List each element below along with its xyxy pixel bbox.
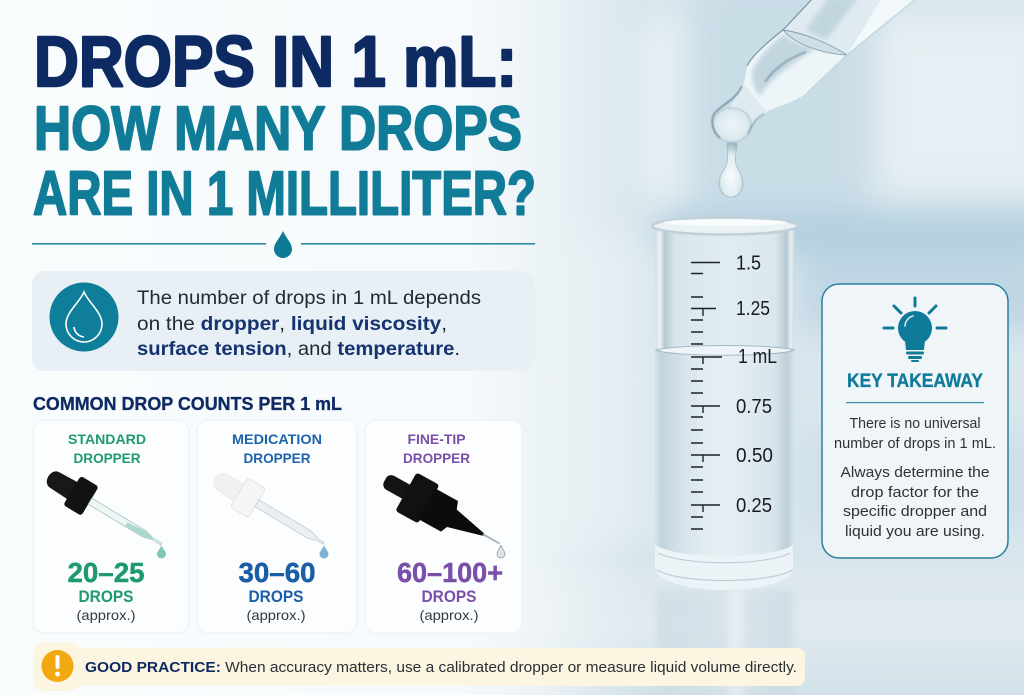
title: DROPS IN 1 mL: [34,23,517,102]
icon: water drop in circle [50,282,118,352]
card: standard dropper [33,420,189,633]
count: 60-100+ drops: DROPS [422,587,476,606]
count: 30-60 drops [238,557,316,606]
graduation labels [736,252,777,517]
standard dropper label: STANDARD [68,431,146,447]
glass pipette with hanging drop [712,0,917,197]
intro text [137,287,481,360]
count: 60-100+ drops: 60–100+ [397,557,503,588]
count: 20-25 drops: 20–25 [68,557,144,588]
intro text: The number of drops in 1 mL depends [137,287,481,309]
title divider with drop [32,231,535,258]
fine-tip dropper label [403,431,470,466]
icon: white dropper [207,464,333,558]
graduation labels: 0.25 [736,494,772,517]
icon: warning circle [42,650,74,682]
title: HOW MANY DROPS [34,94,522,164]
graduation labels: 1.5 [736,252,761,274]
key takeaway text: drop factor for the [851,485,979,501]
intro panel [32,271,535,371]
medication dropper label [232,431,322,466]
key takeaway text [834,416,996,540]
standard dropper label [68,431,146,466]
beaker glass body [652,218,798,590]
beaker reflection on table [657,590,793,695]
graduation labels: 0.50 [736,444,773,467]
key takeaway panel [822,284,1008,558]
count: 60-100+ drops [397,557,503,606]
falling drop [719,143,743,197]
graduation labels: 1.25 [736,297,770,320]
title [33,23,536,228]
graduation labels: 0.75 [736,395,772,418]
count: 20-25 drops [68,557,144,606]
fine-tip dropper label: DROPPER [403,450,470,466]
section heading: COMMON DROP COUNTS PER 1 mL [33,393,342,414]
graduation labels: 1 mL [738,345,777,368]
intro text: on the dropper , liquid viscosity , [137,313,447,335]
approx note: (approx.) [76,607,136,623]
neck and bulb at pipette tip [712,84,767,143]
icon: light bulb [884,298,946,362]
pipette tube [742,0,917,112]
card: medication dropper [197,420,357,633]
key takeaway text: There is no universal [850,416,980,432]
approx note: (approx.) [246,607,306,623]
key takeaway text: Always determine the [840,465,990,481]
medication dropper label: MEDICATION [232,431,322,447]
key takeaway text: liquid you are using. [845,524,985,540]
icon: black dropper [40,462,170,559]
graduation ticks [691,262,722,529]
banner text: GOOD PRACTICE: When accuracy matters, use a calibrated dropper or measure liquid volume directly. [85,660,797,676]
card: fine-tip dropper [365,420,522,633]
icon: fine-tip black dropper [374,461,510,563]
fine-tip dropper label: FINE-TIP [408,431,466,447]
measuring beaker [652,218,798,695]
count: 30-60 drops: 30–60 [238,557,316,588]
approx note: (approx.) [420,607,478,623]
standard dropper label: DROPPER [74,450,140,466]
count: 20-25 drops: DROPS [78,587,134,606]
medication dropper label: DROPPER [244,450,310,466]
good practice banner [33,642,805,691]
key takeaway text: number of drops in 1 mL. [834,436,996,452]
title: ARE IN 1 MILLILITER? [33,160,536,228]
intro text: surface tension , and temperature. [137,338,460,360]
count: 30-60 drops: DROPS [248,587,304,606]
key takeaway text: specific dropper and [843,504,987,520]
key takeaway heading: KEY TAKEAWAY [847,370,983,392]
